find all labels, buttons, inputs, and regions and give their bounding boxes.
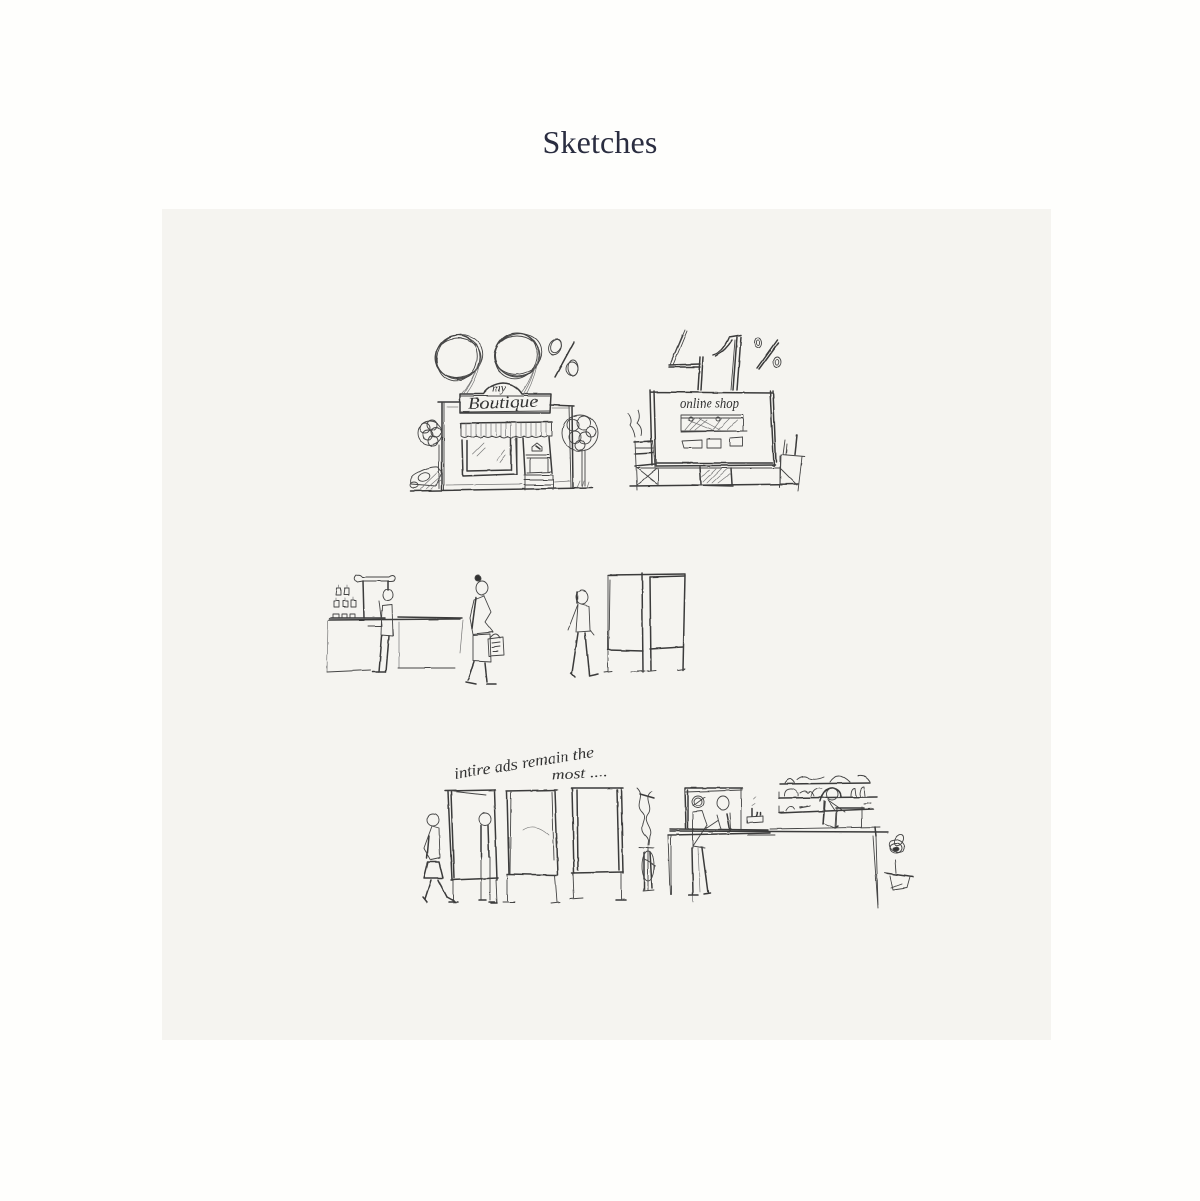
awning <box>461 422 552 438</box>
bottles <box>333 585 356 618</box>
door and steps <box>523 437 553 490</box>
panel: sketch paper <box>162 209 1051 1040</box>
display panels <box>604 573 685 672</box>
title: Sketches <box>543 124 657 160</box>
figure: woman with bag <box>466 575 504 684</box>
number 41 <box>669 330 741 390</box>
sign: my Boutique <box>460 381 551 413</box>
sketch: in-store ads row <box>423 744 655 903</box>
percent sign <box>546 337 578 377</box>
counter legs <box>668 835 878 908</box>
figure: customer <box>689 796 710 902</box>
desk <box>630 456 798 486</box>
ad panel 1 with viewer <box>445 790 498 903</box>
figure: shopkeeper behind table <box>820 788 845 828</box>
number 99 <box>429 327 546 393</box>
display board <box>685 788 742 830</box>
building walls <box>410 402 592 491</box>
tree: left <box>418 420 442 488</box>
sketch: long counter with shelves <box>668 776 913 908</box>
website mockup <box>681 415 747 448</box>
figure: person walking <box>568 590 598 677</box>
percent sign <box>754 338 781 369</box>
sketch: 41% online shop monitor <box>628 330 805 491</box>
shopping bag <box>488 634 504 656</box>
car <box>410 467 442 489</box>
tree: right <box>562 415 598 488</box>
small table <box>836 803 871 828</box>
figure: walking woman <box>423 814 456 902</box>
handwritten note: most .... <box>551 764 608 784</box>
sketch: counter with two figures <box>327 573 685 684</box>
ad panel 2 <box>503 790 560 903</box>
monitor stand <box>700 467 732 484</box>
monitor <box>650 390 776 466</box>
mirror frame <box>354 575 395 618</box>
figure: assistant <box>706 796 731 830</box>
online shop label: online shop <box>680 396 739 412</box>
counter <box>327 617 463 672</box>
sign: my Boutique: Boutique <box>468 392 539 413</box>
sign: my Boutique: my <box>492 381 507 395</box>
flower pot <box>885 833 913 890</box>
chair and steam <box>628 410 658 490</box>
handwritten note: intire ads remain the <box>453 744 595 783</box>
shelves <box>779 776 877 813</box>
sketch: 99% boutique storefront <box>410 327 598 491</box>
pencil pot <box>780 435 805 491</box>
small item on counter <box>747 797 763 823</box>
counter top <box>668 827 888 836</box>
figure: shopkeeper <box>372 589 393 672</box>
shop window <box>462 438 517 476</box>
ad panel 3 <box>570 788 626 900</box>
potted plant <box>637 788 655 891</box>
